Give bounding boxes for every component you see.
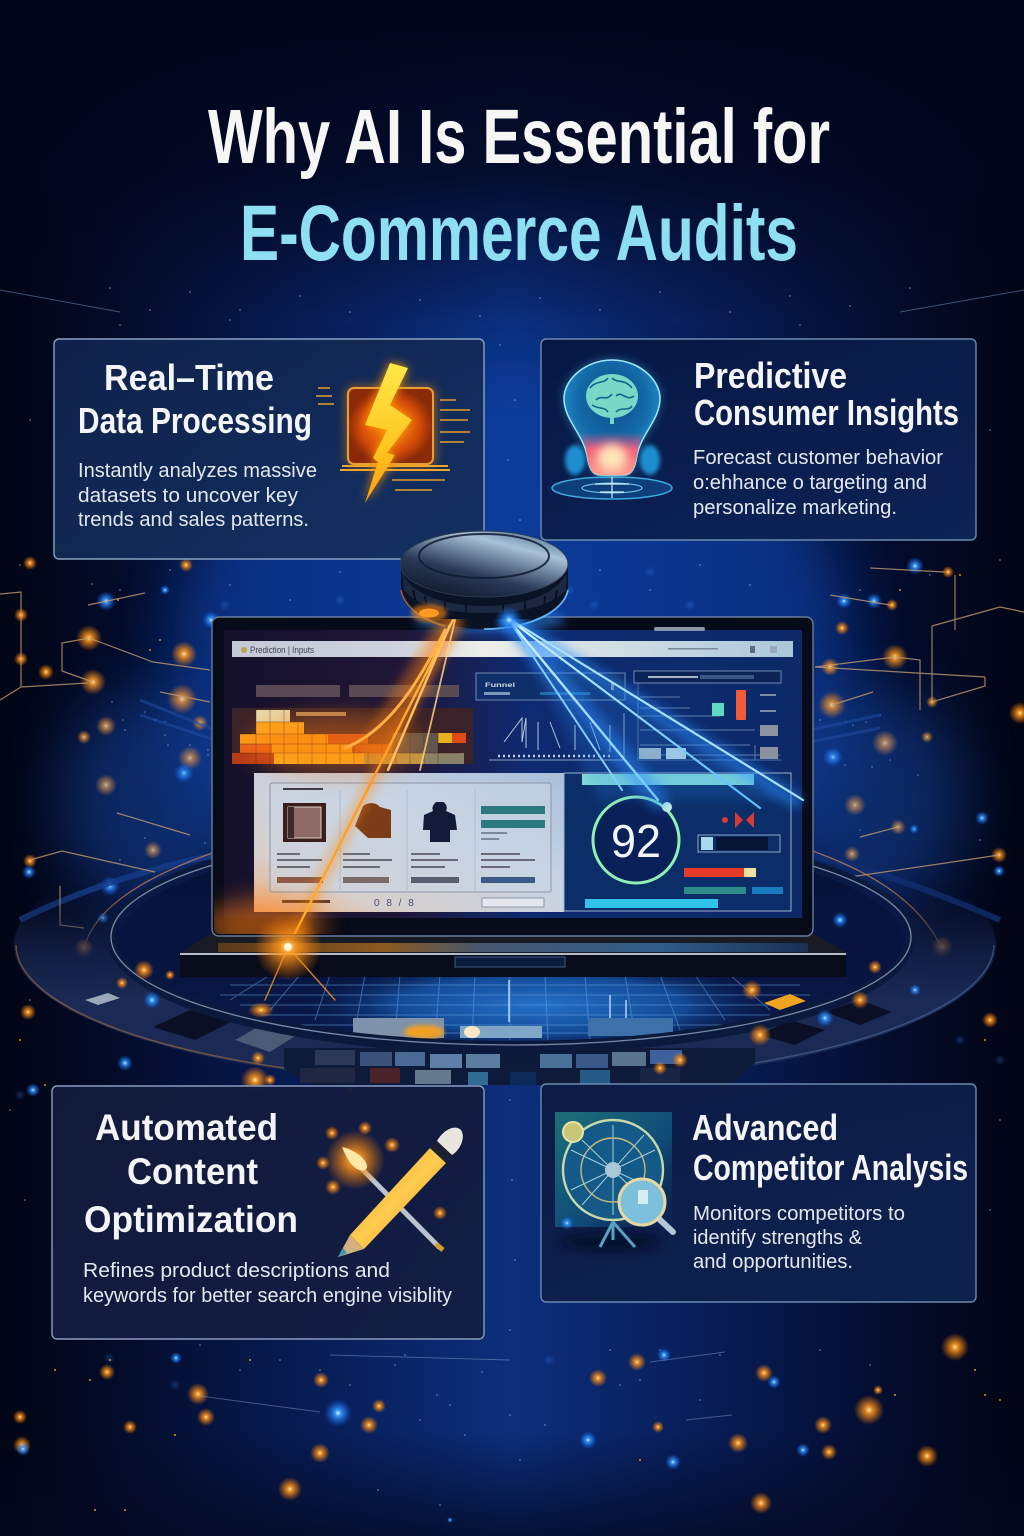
heading [692,1107,968,1188]
product buttons [277,877,535,883]
mini panel [476,673,625,700]
score 92: 92 [611,815,661,867]
title: Why AI Is Essential for [208,94,830,180]
heading: Real–Time [104,357,274,398]
orange glow particles [13,556,1024,1514]
laptop screen [212,617,813,936]
heading [78,357,312,441]
title [208,94,830,277]
product text lines [277,854,535,867]
body text [693,1203,905,1273]
beam source glow [495,606,523,634]
panel: automated content optimization [52,1086,484,1339]
heading: Optimization [84,1199,298,1240]
heading: Data Processing [78,400,312,441]
icon: lightning bolt [316,363,470,503]
side energy arcs [20,690,1000,948]
body text [78,460,317,531]
upper side sparkle lines [0,290,1024,1420]
icon: radar with magnifier [555,1112,673,1250]
panel: predictive consumer insights [541,339,976,540]
body text: and opportunities. [693,1251,853,1273]
product panel [254,773,564,912]
body text: personalize marketing. [693,497,897,519]
heading: Consumer Insights [694,392,959,433]
orange flare [254,913,335,1000]
heading [84,1107,298,1240]
scanner light beams [205,606,803,1000]
laptop base [180,933,846,977]
body text: o:ehhance o targeting and [693,472,927,494]
panel: advanced competitor analysis [541,1084,976,1302]
product: frame [283,803,326,842]
browser bar: Prediction | Inputs [250,645,314,655]
heading: Automated [95,1107,278,1148]
blue beam [509,620,803,808]
red bar [684,868,756,877]
body text: keywords for better search engine visiblity [83,1285,452,1307]
body text: Monitors competitors to [693,1203,905,1225]
body text: Refines product descriptions and [83,1260,390,1282]
heading: Content [127,1151,258,1192]
central ai scanner device [400,531,568,632]
icon: brain light bulb [552,360,672,499]
body text: trends and sales patterns. [78,509,309,531]
body text: Instantly analyzes massive [78,460,317,482]
product: bag [355,803,391,838]
product: teal labels [481,806,545,840]
circuit lines [0,568,1024,928]
heat map [232,708,473,764]
circular platform [14,859,996,1086]
blue glow particles [16,557,1005,1523]
heading: Advanced [692,1107,838,1148]
icon: pencil and wand [316,1121,463,1257]
body text: identify strengths & [693,1227,863,1249]
floor grid [220,977,810,1041]
panel: real-time data processing [54,339,484,559]
mini panel: Funnel [485,682,515,689]
score panel [564,773,791,911]
heading: Predictive [694,355,847,396]
right panel [634,671,781,760]
body text [83,1260,452,1307]
header pills [256,685,459,697]
title: E-Commerce Audits [240,188,798,277]
line chart [489,713,624,760]
orange beam [205,620,455,951]
body text [693,447,943,519]
status meter [698,835,780,852]
body text: datasets to uncover key [78,485,298,507]
laptop [180,617,846,977]
body text: Forecast customer behavior [693,447,943,469]
heading [694,355,959,433]
browser bar [232,641,793,657]
status mark [722,812,754,828]
product: shirt [423,802,457,842]
platform tiles [85,993,892,1085]
score 92 [593,797,679,883]
product panel: 0 8 / 8 [374,898,416,909]
